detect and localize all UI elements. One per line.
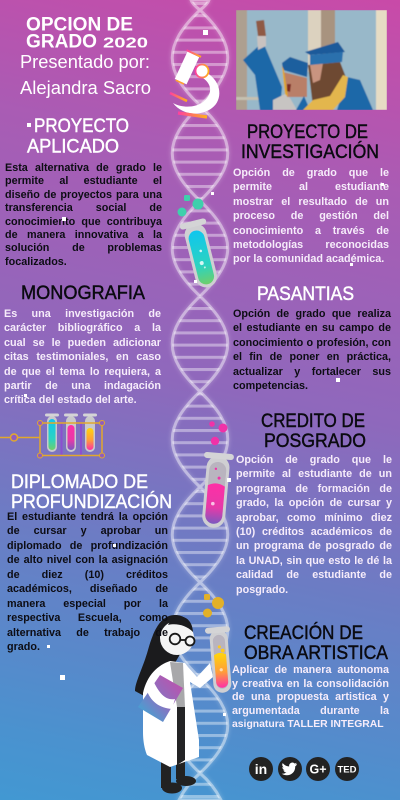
text: pasantias: conocimiento o profesión, con bbox=[233, 337, 391, 349]
text: creacion de obra artistica: de una propuesta artistica y bbox=[232, 691, 389, 703]
dna helix bbox=[172, 0, 228, 800]
text: creacion de obra artistica: Aplicar de manera autonoma bbox=[232, 664, 389, 676]
text: monografia: citas testimoniales, en caso bbox=[4, 351, 161, 363]
heading: creacion de obra artistica: CREACIÓN DE bbox=[244, 622, 363, 644]
icon: pink test tube bbox=[198, 421, 234, 529]
text: proyecto de investigacion bbox=[233, 167, 389, 265]
text: proyecto aplicado: focalizados. bbox=[5, 256, 67, 268]
text: diplomado de profundizacion bbox=[7, 511, 168, 653]
text: creacion de obra artistica bbox=[232, 664, 390, 730]
text: credito de posgrado: grado, la opción de cursar y bbox=[236, 497, 392, 509]
title: GRADO bbox=[26, 32, 97, 53]
text: diplomado de profundizacion: académicos, diseñado de bbox=[7, 583, 168, 595]
text: monografia: cual se le pueden adicionar bbox=[4, 337, 161, 349]
text: proyecto de investigacion: conocimiento a través de bbox=[233, 225, 389, 237]
heading: credito de posgrado bbox=[261, 411, 366, 452]
icon: twitter bbox=[278, 757, 302, 781]
social icons bbox=[249, 757, 359, 781]
text: diplomado de profundizacion: grado. bbox=[7, 641, 40, 653]
text: proyecto aplicado: permite al estudiante el bbox=[5, 175, 162, 187]
text: credito de posgrado: calidad de estudiante de bbox=[236, 569, 392, 581]
text: pasantias: competencias. bbox=[233, 380, 308, 392]
text: creacion de obra artistica: argumentada durante la bbox=[232, 704, 389, 716]
text: monografia: carácter bibliográfico a la bbox=[4, 322, 161, 334]
text: monografia: crítica del estado del arte. bbox=[4, 394, 137, 406]
text: proyecto aplicado: de manera innovativa a la bbox=[5, 229, 162, 241]
text: proyecto aplicado: conocimiento que contribuya bbox=[5, 216, 162, 228]
text: pasantias: actualizar y fortalecer sus bbox=[233, 366, 391, 378]
text: proyecto aplicado: transferencia social de bbox=[5, 202, 162, 214]
text: proyecto de investigacion: metodologías reconocidas bbox=[233, 239, 389, 251]
text: diplomado de profundizacion: alternativa de trabajo de bbox=[7, 627, 168, 639]
text: credito de posgrado: programa de formación de bbox=[236, 483, 392, 495]
text: diplomado de profundizacion: manera especial por la bbox=[7, 598, 168, 610]
heading: proyecto aplicado: PROYECTO bbox=[34, 116, 129, 137]
heading: proyecto de investigacion: PROYECTO DE bbox=[247, 122, 368, 143]
heading: monografia: MONOGRAFIA bbox=[21, 283, 145, 304]
title: OPCION DE bbox=[26, 14, 133, 36]
text: monografia bbox=[4, 308, 162, 406]
text: diplomado de profundizacion: diplomado de profundización bbox=[7, 540, 168, 552]
text: proyecto aplicado: diseño de proyectos para una bbox=[5, 189, 162, 201]
text: diplomado de profundizacion: respectiva Escuela, como bbox=[7, 612, 168, 624]
title bbox=[26, 14, 148, 53]
text: proyecto de investigacion: permite al estudiante bbox=[233, 181, 389, 193]
text: pasantias: el fin de poner en práctica, bbox=[233, 351, 391, 363]
heading: creacion de obra artistica bbox=[244, 622, 388, 664]
text: diplomado de profundizacion: de diez (10) créditos bbox=[7, 569, 168, 581]
text: proyecto aplicado: Esta alternativa de grado le bbox=[5, 162, 162, 174]
text: credito de posgrado bbox=[236, 454, 392, 596]
text: proyecto aplicado: solución de problemas bbox=[5, 242, 162, 254]
heading: creacion de obra artistica: OBRA ARTISTICA bbox=[244, 643, 388, 664]
text: proyecto aplicado bbox=[5, 162, 162, 268]
icon: ted: TED bbox=[338, 764, 357, 776]
subtitle: presenter: Presentado por: bbox=[20, 52, 150, 72]
heading: diplomado de profundizacion: PROFUNDIZACIÓN bbox=[11, 491, 172, 513]
text: monografia: partir de una indagación bbox=[4, 380, 161, 392]
text: diplomado de profundizacion: de cursar y aprobar un bbox=[7, 525, 168, 537]
subtitle: presenter bbox=[20, 52, 151, 98]
heading: proyecto aplicado bbox=[27, 116, 129, 158]
text: diplomado de profundizacion: El estudiante tendrá la opción bbox=[7, 511, 168, 523]
text: proyecto de investigacion: proceso de gestión del bbox=[233, 210, 389, 222]
text: creacion de obra artistica: y creativa en la consolidación bbox=[232, 678, 389, 690]
subtitle: presenter: Alejandra Sacro bbox=[20, 78, 151, 98]
text: pasantias bbox=[233, 308, 392, 392]
icon: cyan test tube bbox=[178, 195, 222, 290]
heading: pasantias: PASANTIAS bbox=[257, 284, 354, 305]
text: credito de posgrado: (10) créditos académicos de bbox=[236, 526, 392, 538]
text: credito de posgrado: Opción de grado que le bbox=[236, 454, 392, 466]
icon: google plus: G+ bbox=[309, 762, 327, 776]
heading: diplomado de profundizacion: DIPLOMADO DE bbox=[11, 472, 148, 493]
heading: proyecto de investigacion bbox=[241, 122, 379, 163]
text: creacion de obra artistica: asignatura TALLER INTEGRAL bbox=[232, 719, 384, 730]
text: diplomado de profundizacion: de alto nivel con la asignación bbox=[7, 554, 168, 566]
text: credito de posgrado: posgrado. bbox=[236, 584, 288, 596]
icon: microscope bbox=[170, 49, 219, 117]
text: monografia: Es una investigación de bbox=[4, 308, 161, 320]
heading: credito de posgrado: POSGRADO bbox=[264, 431, 366, 452]
text: pasantias: Opción de grado que realiza bbox=[233, 308, 391, 320]
icon: three test tubes in rack bbox=[0, 414, 104, 458]
text: credito de posgrado: aprobar, como mínimo diez bbox=[236, 512, 392, 524]
photo: graduates celebrating bbox=[236, 10, 387, 110]
heading: diplomado de profundizacion bbox=[11, 472, 172, 513]
text: pasantias: el estudiante en su campo de bbox=[233, 322, 391, 334]
icon: scientist with yellow test tube bbox=[135, 594, 235, 794]
text: credito de posgrado: la UNAD, sin que esto le dé la bbox=[236, 555, 392, 567]
text: monografia: de que el tema lo requiera, a bbox=[4, 366, 161, 378]
text: credito de posgrado: un programa de posgrado de bbox=[236, 540, 392, 552]
title: 2020 bbox=[103, 35, 148, 52]
text: proyecto de investigacion: mostrar el resultado de un bbox=[233, 196, 389, 208]
icon: linkedin: in bbox=[255, 761, 267, 777]
text: proyecto de investigacion: por la comunidad académica. bbox=[233, 253, 384, 265]
heading: credito de posgrado: CREDITO DE bbox=[261, 411, 365, 432]
text: proyecto de investigacion: Opción de grado que le bbox=[233, 167, 389, 179]
heading: proyecto de investigacion: INVESTIGACIÓN bbox=[241, 141, 379, 163]
text: credito de posgrado: permite al estudiante de un bbox=[236, 468, 392, 480]
heading: proyecto aplicado: APLICADO bbox=[27, 136, 119, 158]
